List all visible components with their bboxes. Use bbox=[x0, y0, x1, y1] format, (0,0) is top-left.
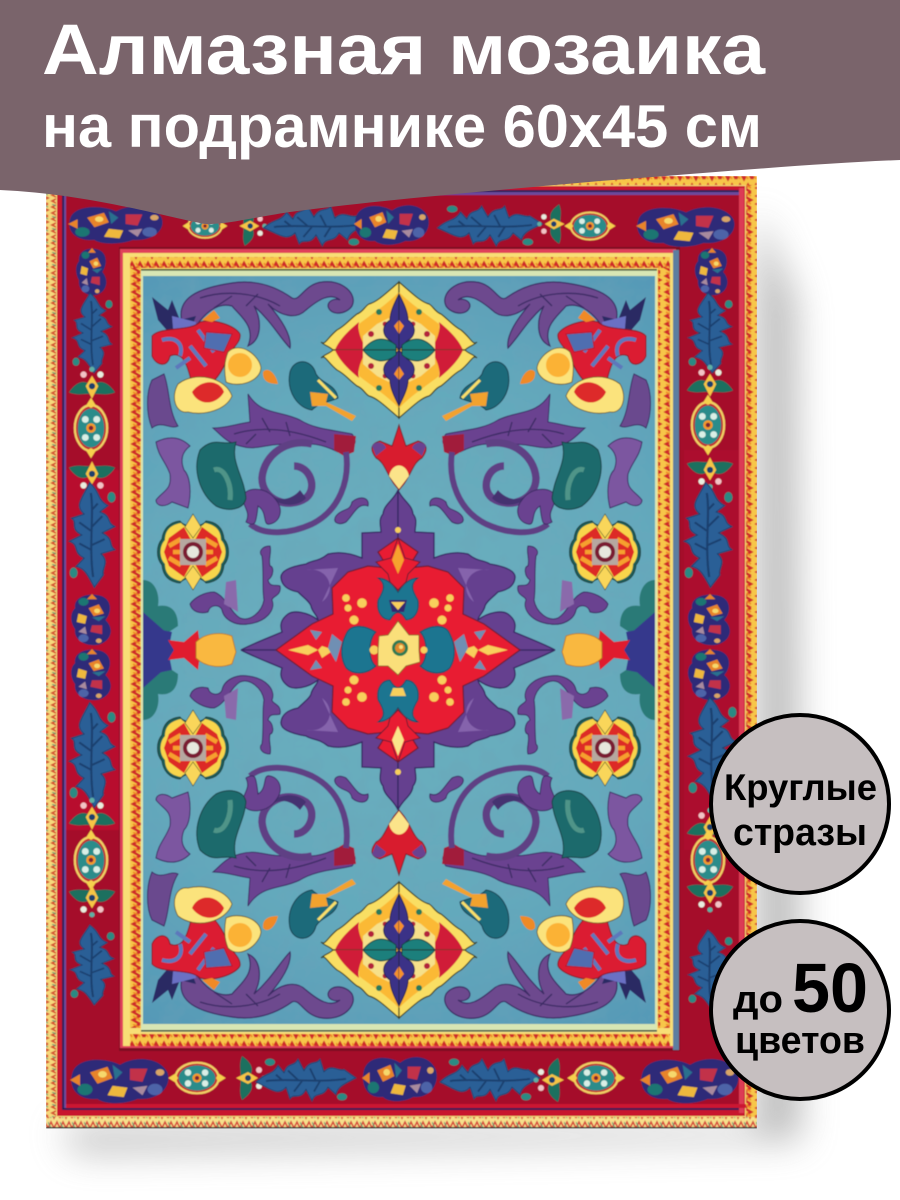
central star medallion bbox=[241, 490, 555, 810]
title line 2: на подрамнике 60х45 см bbox=[42, 93, 762, 160]
badge number 50: 50 bbox=[792, 949, 868, 1027]
lower small red flower bbox=[372, 810, 426, 875]
top and bottom red sprays bbox=[376, 538, 420, 762]
right side flower bbox=[562, 626, 655, 676]
badge text цветов: цветов bbox=[735, 1020, 865, 1062]
outer patterned edge bbox=[46, 176, 757, 1128]
central yellow star bbox=[378, 621, 420, 675]
inner gold frame bbox=[119, 247, 680, 1051]
border ornaments: top row bbox=[68, 204, 734, 247]
badge text до: до bbox=[733, 979, 783, 1021]
badge text line 1: Круглые bbox=[724, 767, 877, 808]
yellow side sprays bbox=[288, 527, 508, 775]
upper small red flower bbox=[372, 425, 426, 490]
badge: up to 50 colours bbox=[711, 921, 889, 1099]
badge text line 2: стразы bbox=[733, 812, 867, 854]
border ornaments: right column bbox=[684, 248, 736, 1010]
painted canvas with carpet design bbox=[46, 176, 757, 1128]
header banner bbox=[0, 0, 900, 224]
red inner star bbox=[276, 538, 520, 762]
top and bottom teal petals bbox=[378, 578, 418, 722]
grey-blue side blossoms bbox=[310, 630, 486, 670]
purple outer star bbox=[241, 490, 555, 810]
lower gold diamond medallion bbox=[321, 882, 477, 1018]
badge: round rhinestones bbox=[711, 715, 889, 893]
border ornaments: bottom row bbox=[70, 1056, 738, 1103]
blue central field bbox=[143, 276, 655, 1024]
border ornaments: left column bbox=[69, 248, 115, 1005]
red border band bbox=[57, 186, 746, 1116]
upper gold diamond medallion bbox=[321, 282, 477, 418]
left side flower bbox=[143, 626, 236, 676]
left and right teal flowers bbox=[342, 626, 454, 673]
mirrored scroll ornaments bbox=[143, 282, 655, 1018]
canvas drop shadow bbox=[60, 210, 800, 1152]
title line 1: Алмазная мозаика bbox=[42, 11, 766, 90]
